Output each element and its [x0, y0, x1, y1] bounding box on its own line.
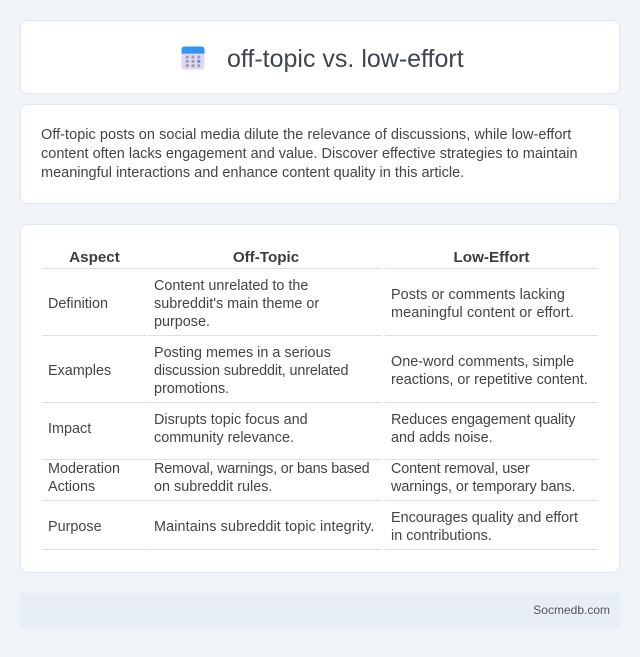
row: moderation actions: Removal, warnings, or bans based [154, 461, 370, 477]
row: impact: Disrupts topic focus and [154, 412, 308, 428]
row: purpose: Maintains subreddit topic integrity. [154, 519, 374, 535]
panel: title card [20, 20, 620, 94]
table header: Off-Topic [233, 249, 299, 266]
intro paragraph: meaningful interactions and enhance content quality in this article. [41, 165, 464, 181]
row: purpose: in contributions. [391, 528, 492, 544]
row: impact: Reduces engagement quality [391, 412, 575, 428]
row: impact [48, 412, 576, 446]
intro paragraph [41, 127, 578, 181]
row: definition: Definition [48, 296, 108, 312]
row: examples: Examples [48, 363, 111, 379]
panel: intro text [20, 104, 620, 204]
intro paragraph: Off-topic posts on social media dilute the relevance of discussions, while low-effort [41, 127, 571, 143]
title: off-topic vs. low-effort [227, 45, 464, 73]
table header: Aspect [69, 249, 120, 266]
table header: Low-Effort [454, 249, 529, 266]
row: moderation actions: Actions [48, 479, 95, 495]
row: examples: One-word comments, simple [391, 354, 574, 370]
row: definition: Posts or comments lacking [391, 287, 565, 303]
row: definition: subreddit's main theme or [154, 296, 319, 312]
footer source text: Socmedb.com [533, 603, 610, 617]
row: moderation actions: warnings, or temporary bans. [391, 479, 575, 495]
row: examples: Posting memes in a serious [154, 345, 331, 361]
panel: comparison table [20, 224, 620, 573]
row: definition: purpose. [154, 314, 210, 330]
row: moderation actions: Moderation [48, 461, 120, 477]
panel: footer [20, 593, 620, 627]
row: moderation actions [48, 461, 575, 495]
row: examples: reactions, or repetitive content. [391, 372, 588, 388]
row: moderation actions: on subreddit rules. [154, 479, 272, 495]
row: examples: discussion subreddit, unrelated [154, 363, 348, 379]
row: purpose: Encourages quality and effort [391, 510, 578, 526]
row: moderation actions: Content removal, user [391, 461, 530, 477]
row: examples [48, 345, 588, 397]
intro paragraph: content often lacks engagement and value. Discover effective strategies to maintain [41, 146, 578, 162]
row: examples: promotions. [154, 381, 229, 397]
row: definition: Content unrelated to the [154, 278, 308, 294]
row: definition: meaningful content or effort. [391, 305, 574, 321]
row: definition [48, 278, 574, 330]
table header [69, 249, 530, 266]
row: purpose [48, 510, 578, 544]
row: impact: and adds noise. [391, 430, 493, 446]
row: impact: Impact [48, 421, 91, 437]
row: purpose: Purpose [48, 519, 102, 535]
row: impact: community relevance. [154, 430, 294, 446]
icon: calendar [181, 46, 205, 70]
